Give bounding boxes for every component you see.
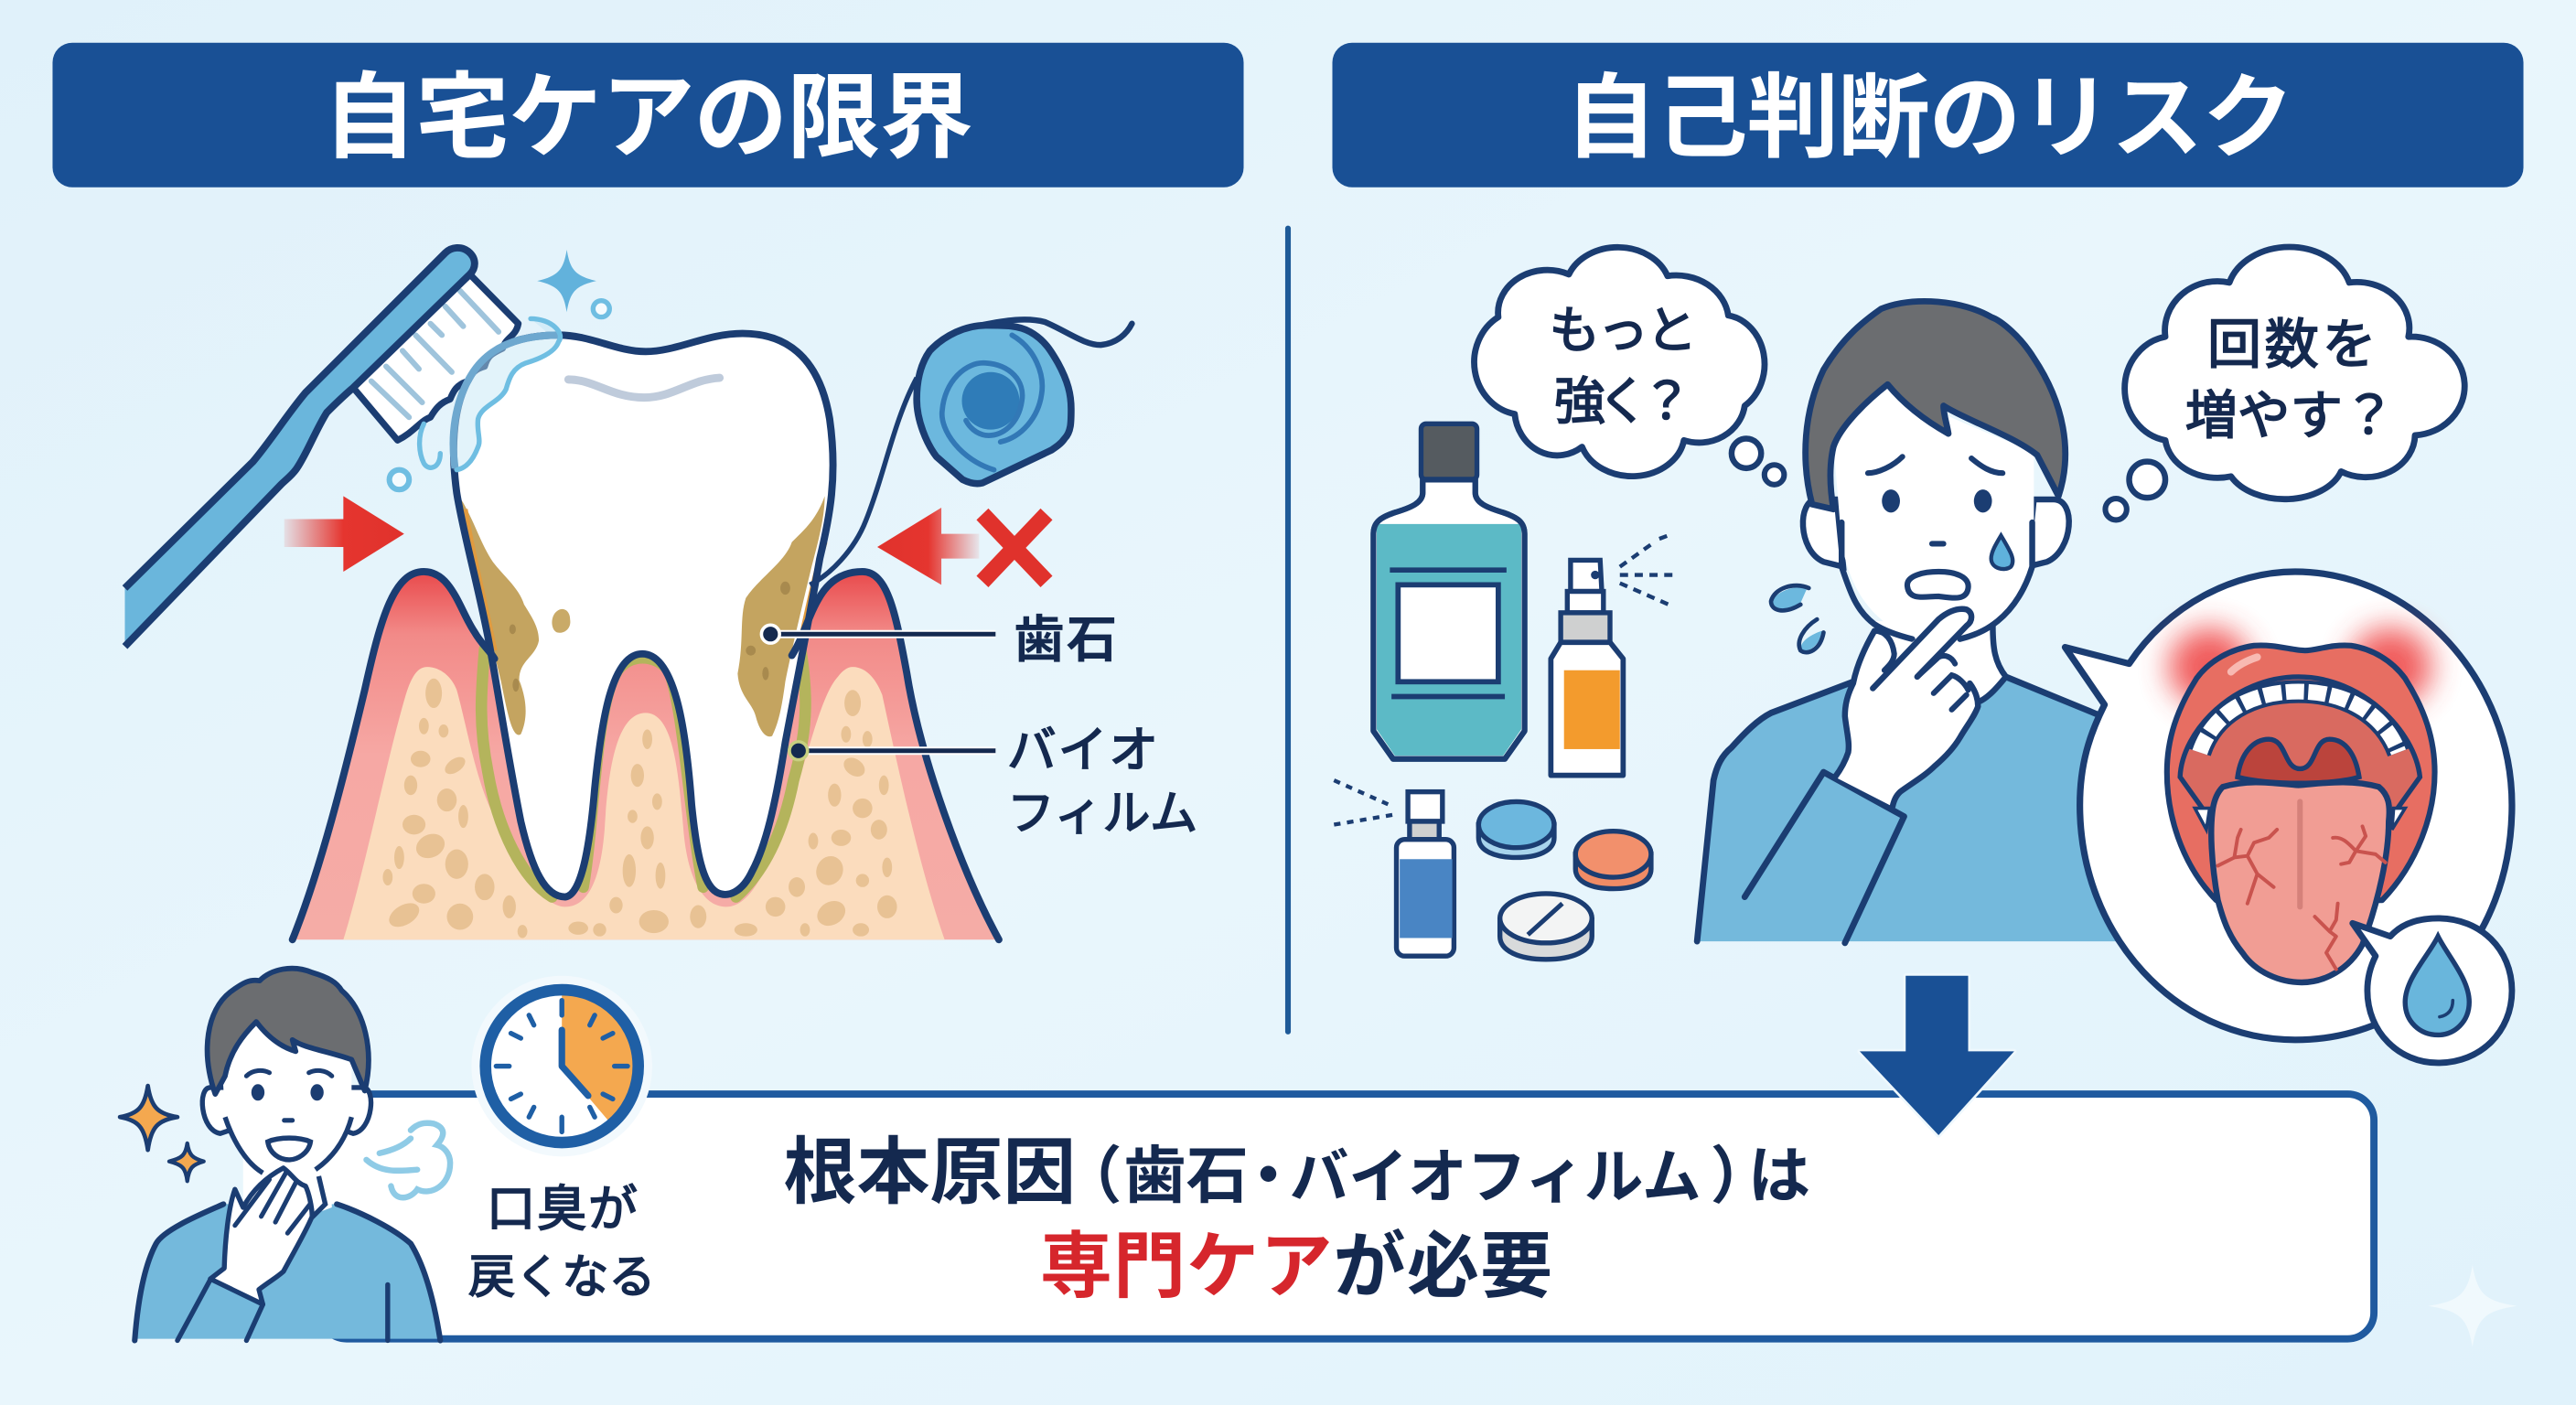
side teeth <box>2195 809 2405 830</box>
sleeve lines <box>1744 772 1904 943</box>
label: breath returns <box>468 1182 656 1303</box>
label: calculus <box>761 611 1117 668</box>
icon: orange tablet <box>1575 831 1651 889</box>
hair <box>1806 301 2066 509</box>
conclusion text: （ <box>1059 1142 1122 1211</box>
calculus right <box>737 496 825 736</box>
arrow: red right <box>877 508 979 585</box>
label: calculus: 歯石 <box>1014 611 1117 668</box>
right heading bar <box>1332 43 2524 188</box>
spool spiral <box>962 372 1019 430</box>
label: breath returns: 戻くなる <box>468 1250 656 1303</box>
icon: toothbrush <box>124 248 519 647</box>
icon: sparkle small <box>169 1143 204 1181</box>
tooth <box>454 334 833 897</box>
dry mouth callout <box>2353 918 2512 1063</box>
brush handle <box>124 248 475 647</box>
gum outline <box>293 572 999 939</box>
icon: red cross <box>982 514 1046 582</box>
calculus specks <box>510 582 790 692</box>
panel: home care limits <box>124 248 1197 939</box>
thumb and fingers <box>1874 631 1969 710</box>
lips <box>2167 646 2435 900</box>
conclusion emphasis: 専門ケアが必要 <box>1040 1226 1552 1307</box>
inflammation glow <box>2169 627 2431 706</box>
brush head bristles <box>353 274 519 440</box>
arrow: down <box>1860 976 2014 1135</box>
palate <box>2180 677 2420 811</box>
index finger <box>1873 609 1971 688</box>
arrow: red left <box>284 496 404 572</box>
label: biofilm <box>789 724 1197 841</box>
icon: floss roll <box>810 319 1132 585</box>
foam edge <box>456 318 560 470</box>
brows and eyes <box>1868 456 2002 473</box>
gum tissue <box>293 572 999 939</box>
icon: blue tablet <box>1478 801 1554 857</box>
icon: sparkle large <box>120 1086 177 1150</box>
face <box>1833 383 2034 639</box>
ears <box>1803 499 1843 567</box>
conclusion text: ・ <box>1237 1142 1300 1211</box>
center divider <box>1286 229 1290 1032</box>
conclusion text: ） <box>1711 1142 1773 1211</box>
right heading bar: 自己判断のリスク <box>1565 67 2294 169</box>
icon: blue spray bottle <box>1334 780 1454 956</box>
bone spots <box>382 679 897 938</box>
tongue <box>2211 782 2389 982</box>
hand <box>210 1168 312 1304</box>
conclusion box <box>320 1094 2374 1339</box>
left heading bar <box>52 43 1244 188</box>
throat and uvula <box>2238 739 2359 783</box>
foam <box>390 250 609 489</box>
icon: water drop <box>2405 937 2469 1035</box>
conclusion text: 根本原因 <box>784 1132 1076 1213</box>
bubble <box>390 470 409 489</box>
smile <box>268 1138 310 1160</box>
left heading bar: 自宅ケアの限界 <box>323 64 973 169</box>
conclusion text: 歯石 <box>1123 1142 1249 1211</box>
conclusion text: バイオフィルム <box>1290 1143 1701 1210</box>
tear <box>1991 535 2012 569</box>
panel: self-judgment risk <box>1334 247 2512 1063</box>
neck <box>1864 621 2008 723</box>
shirt <box>1697 677 2152 941</box>
foam drip <box>420 424 440 467</box>
ears <box>202 1088 230 1133</box>
figure: smiling man <box>134 969 440 1340</box>
tooth and gum diagram <box>293 334 999 939</box>
hand <box>1835 609 1978 807</box>
sleeve lines <box>177 1280 388 1340</box>
bone <box>343 667 945 939</box>
bristle stripes <box>371 291 499 417</box>
upper teeth <box>2200 692 2399 753</box>
mouth <box>1907 572 1969 598</box>
sparkle <box>537 250 596 312</box>
calculus left <box>460 498 539 735</box>
speech bubble: irritated mouth <box>2065 572 2512 1063</box>
label: biofilm: バイオ <box>1007 724 1158 778</box>
sweat drops <box>1771 585 1823 652</box>
orange tartar edge <box>465 509 825 650</box>
calculus spot <box>552 609 570 633</box>
shirt <box>134 1204 440 1339</box>
clock ticks <box>496 1001 628 1132</box>
icon: white tablet <box>1500 894 1592 960</box>
watermark star <box>2428 1265 2517 1347</box>
icon: mouthwash bottle <box>1373 424 1525 759</box>
hair <box>208 969 369 1094</box>
tooth outline <box>454 334 833 897</box>
bottle label <box>1398 585 1498 681</box>
brows and eyes <box>246 1070 332 1076</box>
icon: breath puff <box>366 1123 450 1197</box>
biofilm <box>481 644 805 897</box>
label: breath returns: 口臭が <box>487 1182 638 1237</box>
label: biofilm: フィルム <box>1007 788 1197 841</box>
thought bubble: more often: 増やす？ <box>2185 387 2395 445</box>
thought bubble: stronger <box>1475 247 1784 485</box>
icon: clock <box>471 976 652 1156</box>
figure: worried man <box>1697 301 2152 943</box>
tooth highlight <box>568 378 720 398</box>
face <box>221 1022 351 1173</box>
tongue cracks <box>2217 826 2386 970</box>
thought bubble: stronger: 強く？ <box>1554 373 1692 430</box>
thought bubble: stronger: もっと <box>1550 303 1697 359</box>
neck <box>243 1150 332 1224</box>
thought bubble: more often: 回数を <box>2207 314 2377 375</box>
thought bubble: more often <box>2105 247 2464 520</box>
tooth outline under foam <box>453 335 559 468</box>
icon: orange spray bottle <box>1551 534 1679 776</box>
bubble <box>593 301 609 317</box>
conclusion text: は <box>1748 1142 1810 1211</box>
clock hands <box>562 1030 588 1096</box>
